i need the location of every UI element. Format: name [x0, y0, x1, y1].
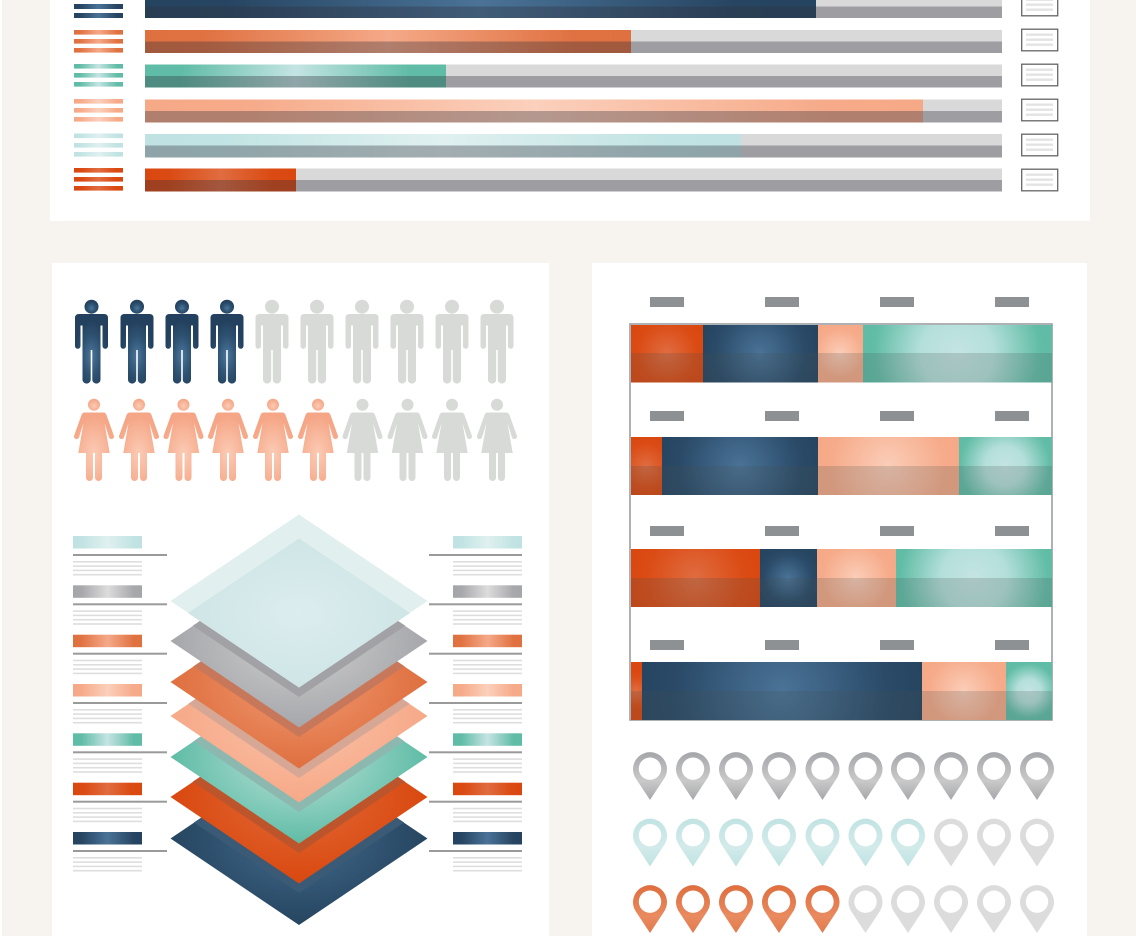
bar row: pale aqua — [74, 134, 1058, 158]
panel: progress bars — [50, 0, 1090, 221]
layer: grey — [170, 554, 428, 728]
pin row: orange — [633, 885, 1054, 933]
chart frame — [630, 324, 1052, 720]
layer: orange — [170, 596, 428, 768]
left legend column — [73, 536, 167, 872]
bar row: navy — [74, 0, 1058, 18]
stacked bar chart — [630, 297, 1052, 720]
pin row: aqua — [633, 819, 1054, 866]
right legend column — [429, 536, 522, 872]
stacked row 2 — [631, 411, 1052, 495]
layer: navy — [170, 752, 428, 925]
panel: people and layers — [52, 263, 549, 936]
stacked row 4 — [631, 640, 1052, 720]
pictogram row: women — [74, 399, 517, 481]
layer: teal — [170, 670, 428, 844]
bar row: orange — [74, 29, 1058, 53]
isometric layer stack — [170, 514, 428, 925]
bar row: red — [74, 168, 1058, 192]
stacked row 1 — [631, 297, 1052, 382]
bar row: teal — [74, 64, 1058, 88]
layer: peach — [170, 630, 428, 802]
panel: stacked bars and pins — [592, 263, 1087, 936]
bar row: peach — [74, 99, 1058, 122]
pin row: grey — [633, 752, 1054, 800]
layer: red — [170, 710, 428, 884]
layer: pale aqua top — [170, 514, 428, 688]
pictogram row: men — [75, 300, 514, 384]
stacked row 3 — [631, 526, 1052, 607]
